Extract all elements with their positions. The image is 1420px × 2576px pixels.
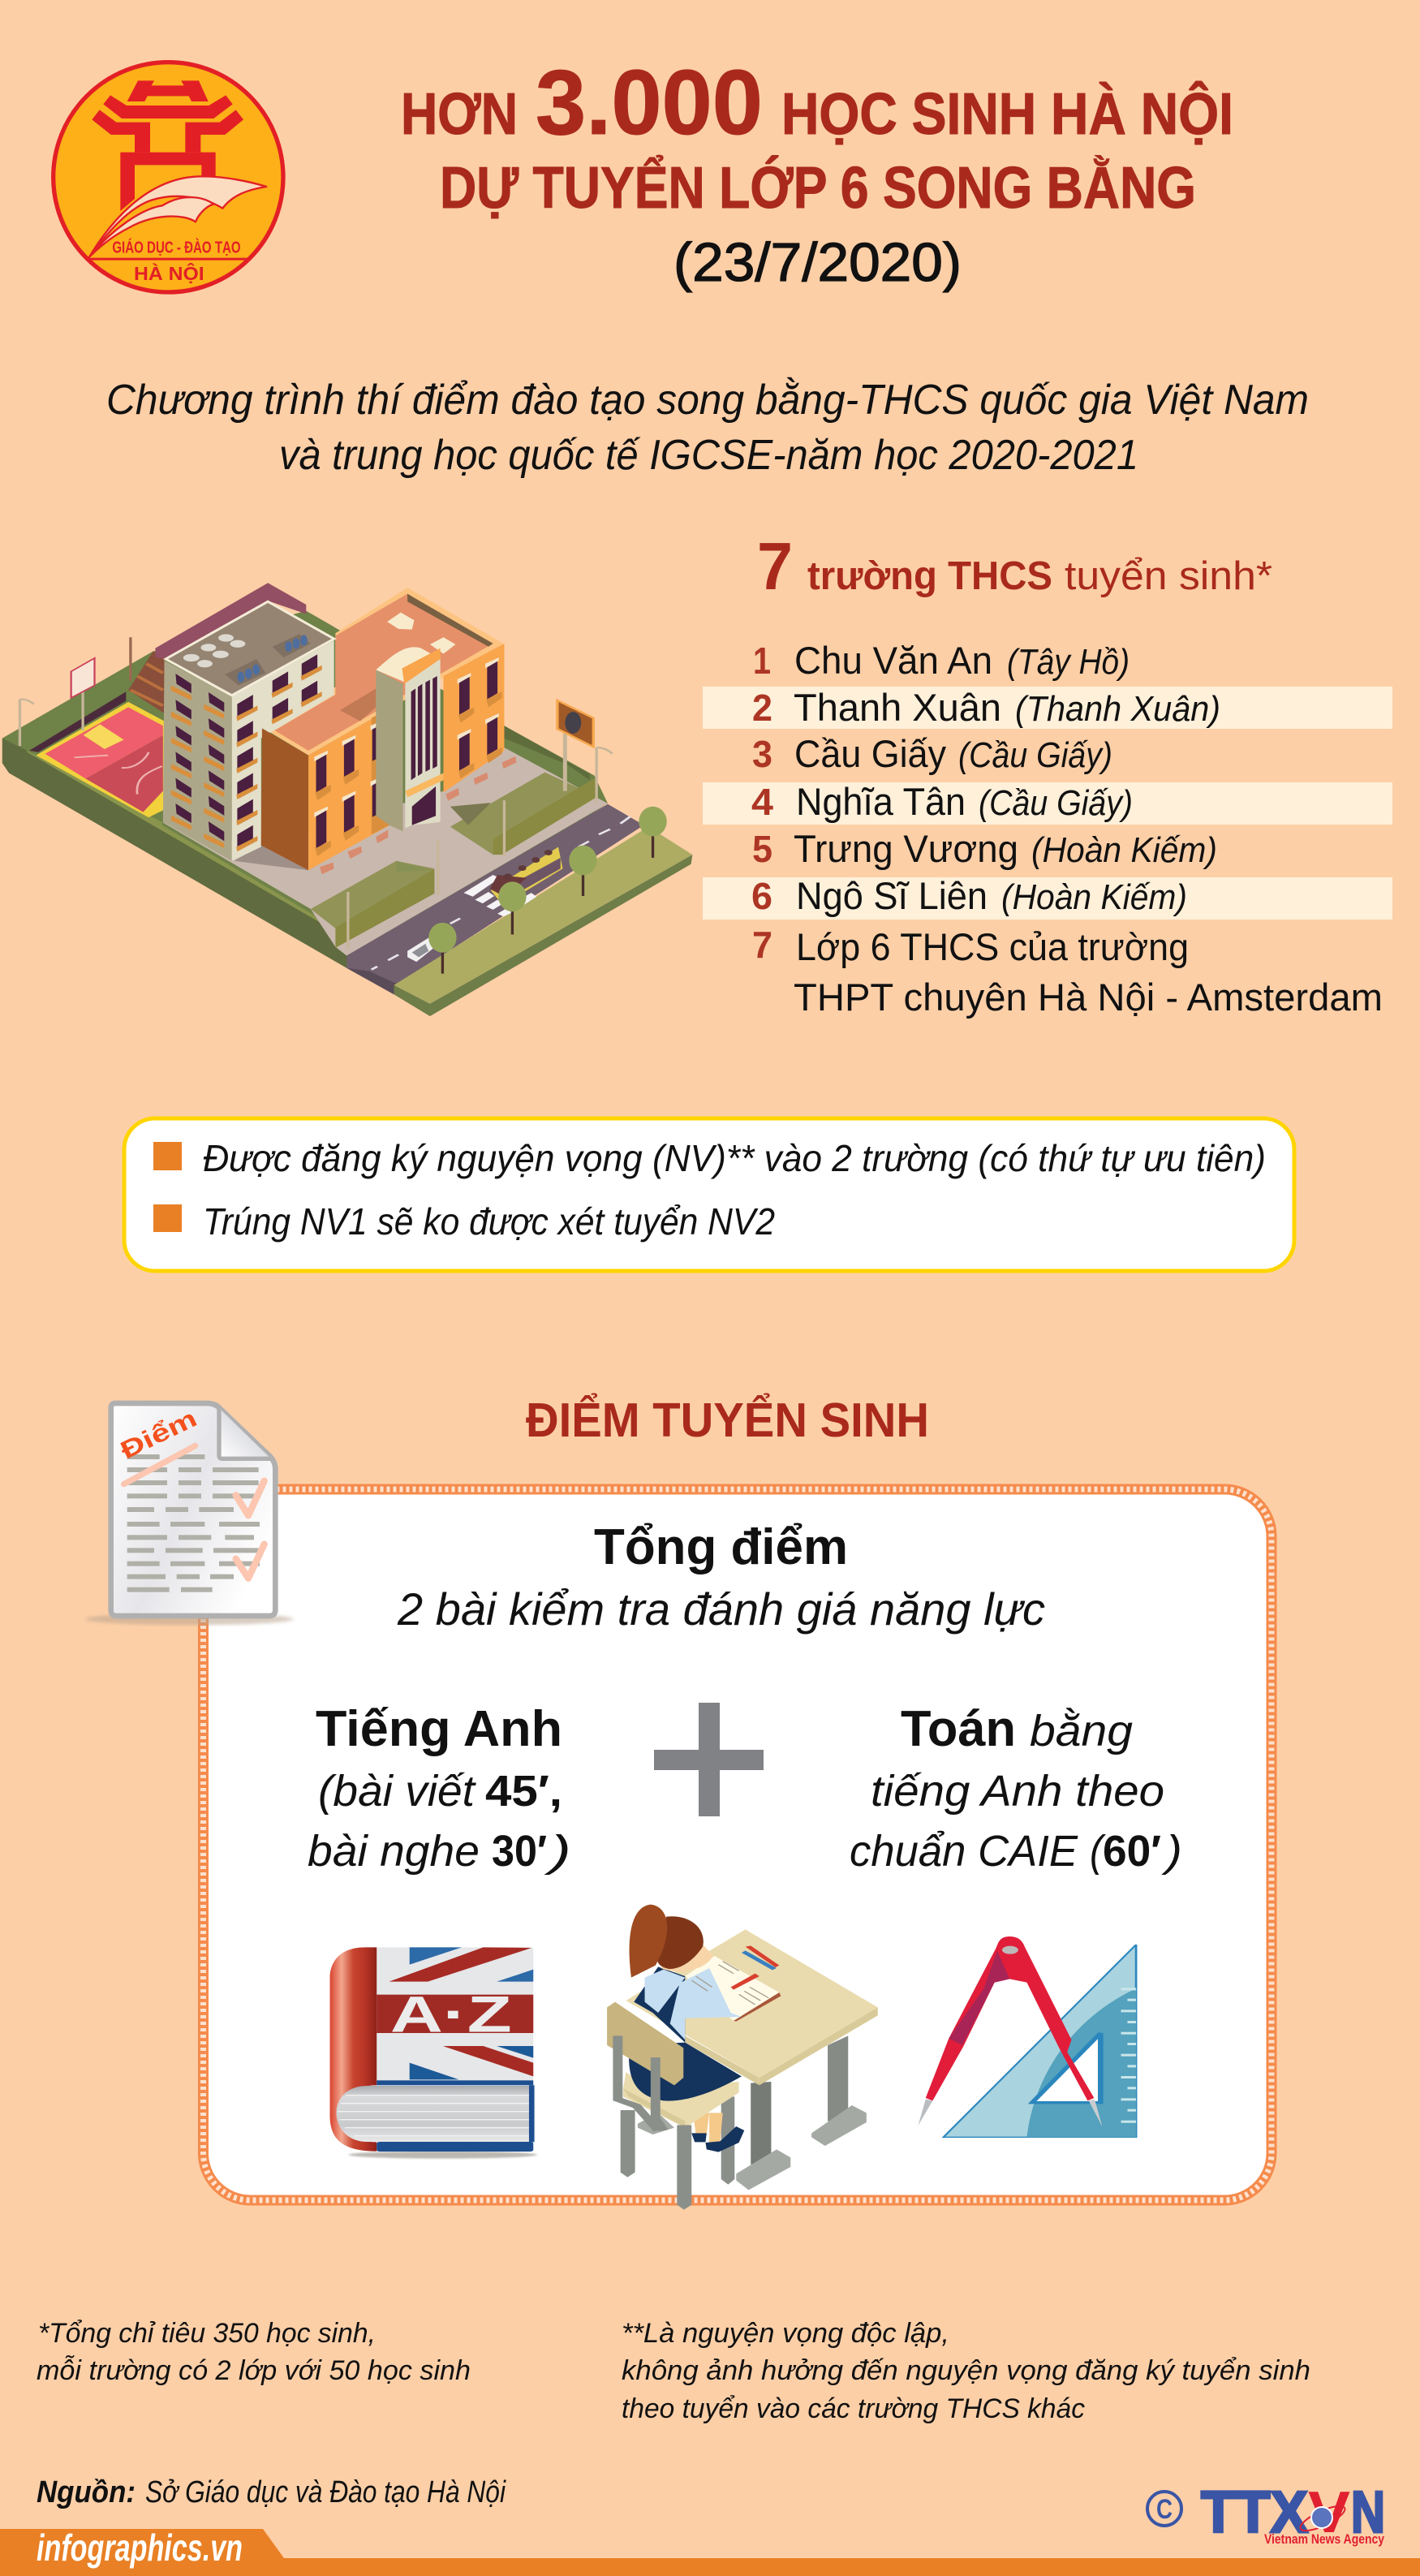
school list: Ngô Sĩ Liên <box>796 874 988 917</box>
school list: (Hoàn Kiếm) <box>1031 830 1217 870</box>
bullet icon 1 <box>153 1142 182 1170</box>
icon: score document <box>86 1401 294 1626</box>
title: (23/7/2020) <box>673 232 962 293</box>
Math test text: Toán <box>901 1701 1016 1757</box>
school list: Thanh Xuân <box>794 686 1001 729</box>
heading: 7 schools: tuyển sinh* <box>1065 554 1272 598</box>
illustration: isometric school <box>2 583 693 1016</box>
footer band: infographics.vn <box>37 2526 243 2569</box>
school list: Nghĩa Tân <box>796 780 966 823</box>
Math test text: chuẩn CAIE <box>850 1827 1078 1876</box>
logo: TTXVN: C <box>1156 2494 1173 2525</box>
logo: TTXVN: N <box>1351 2480 1385 2545</box>
icon: English dictionary <box>330 1947 537 2159</box>
total description: 2 bài kiểm tra đánh giá năng lực <box>397 1583 1045 1635</box>
illustration: student at desk <box>607 1905 878 2210</box>
logo: TTXVN: Vietnam News Agency <box>1264 2531 1384 2547</box>
logo: TTXVN: TTX <box>1201 2480 1308 2545</box>
title: HỌC SINH HÀ NỘI <box>781 81 1233 147</box>
school list: Cầu Giấy <box>794 732 946 775</box>
callout: registration rules: Trúng NV1 sẽ ko được xét tuyển NV2 <box>203 1200 775 1243</box>
bullet icon 2 <box>153 1204 182 1232</box>
school list: 4 <box>751 781 773 823</box>
road <box>346 804 643 994</box>
Math test text: bằng <box>1030 1707 1133 1755</box>
logo: Giáo dục Đào tạo Hà Nội: HÀ NỘI <box>134 263 204 284</box>
logo: TTXVN: V <box>1308 2480 1350 2545</box>
English test text: ) <box>543 1827 571 1876</box>
icon: plus <box>654 1703 764 1816</box>
source <box>37 2475 506 2509</box>
Math test text: tiếng Anh theo <box>871 1767 1164 1816</box>
logo: TTXVN <box>1147 2480 1385 2547</box>
school list: (Hoàn Kiếm) <box>1001 877 1187 917</box>
heading: 7 schools: trường THCS <box>807 554 1052 598</box>
subtitle: Chương trình thí điểm đào tạo song bằng-THCS quốc gia Việt Nam <box>106 377 1309 424</box>
logo: Giáo dục Đào tạo Hà Nội <box>51 60 286 295</box>
illustrations: book, student and geometry tools <box>329 1904 1138 2209</box>
source: Nguồn: <box>37 2475 136 2509</box>
footnote: quota: *Tổng chỉ tiêu 350 học sinh, <box>38 2318 376 2349</box>
school list: 2 <box>752 687 772 729</box>
court <box>29 691 126 752</box>
Math test text: ) <box>1160 1827 1182 1876</box>
callout: registration rules: Được đăng ký nguyện vọng (NV)** vào 2 trường (có thứ tự ưu tiên) <box>203 1137 1266 1179</box>
footnote: quota <box>37 2318 471 2386</box>
school list: 7 <box>752 924 772 966</box>
Math test text: ( <box>1090 1827 1106 1876</box>
panel: score card <box>203 1489 1272 2200</box>
ground <box>2 611 608 968</box>
school list: (Cầu Giấy) <box>979 783 1133 823</box>
school list: 1 <box>753 640 771 682</box>
English test text: (bài viết <box>318 1767 476 1816</box>
tower <box>163 661 232 861</box>
orange building <box>261 728 308 870</box>
school list: (Tây Hồ) <box>1007 642 1130 682</box>
English test text: bài nghe <box>308 1827 480 1876</box>
title: 3.000 <box>536 51 763 153</box>
school list: (Cầu Giấy) <box>958 735 1112 775</box>
school list: THPT chuyên Hà Nội - Amsterdam <box>794 976 1383 1019</box>
section heading: ĐIỂM TUYỂN SINH <box>526 1394 929 1447</box>
orange roof <box>262 588 503 756</box>
icon: English dictionary: A·Z <box>390 1986 512 2043</box>
English test text: 30′ <box>492 1827 547 1876</box>
vehicles <box>491 847 563 901</box>
title: HƠN <box>401 82 518 147</box>
subtitle <box>106 377 1309 479</box>
school list <box>703 639 1392 1019</box>
icon: score document: Điểm <box>116 1404 201 1465</box>
icon: set square <box>944 1945 1136 2137</box>
Math test text: 60′ <box>1103 1827 1161 1876</box>
callout: registration rules <box>124 1118 1294 1271</box>
heading: 7 schools: 7 <box>757 528 793 604</box>
stairs and back block <box>128 651 165 713</box>
school list: Lớp 6 THCS của trường <box>796 925 1189 968</box>
logo: Giáo dục Đào tạo Hà Nội: GIÁO DỤC - ĐÀO TẠO <box>112 239 241 257</box>
title: DỰ TUYỂN LỚP 6 SONG BẰNG <box>440 155 1196 221</box>
footnote: quota: mỗi trường có 2 lớp với 50 học sinh <box>37 2355 471 2386</box>
Math test text <box>850 1701 1182 1876</box>
total heading: Tổng điểm <box>594 1519 848 1575</box>
school list: (Thanh Xuân) <box>1015 689 1220 729</box>
lawns <box>311 861 434 928</box>
English test text <box>308 1701 571 1876</box>
English test text: 45′, <box>485 1767 562 1816</box>
school list: 3 <box>752 733 772 775</box>
footnote: independent preference: theo tuyển vào các trường THCS khác <box>622 2393 1085 2424</box>
source: Sở Giáo dục và Đào tạo Hà Nội <box>145 2475 506 2509</box>
school list: 5 <box>752 828 772 870</box>
heading: 7 schools <box>757 528 1272 604</box>
school list: 6 <box>751 875 772 917</box>
school list: Chu Văn An <box>794 639 992 682</box>
footnote: independent preference: không ảnh hưởng đến nguyện vọng đăng ký tuyển sinh <box>622 2355 1310 2386</box>
footnote: independent preference: **Là nguyện vọng độc lập, <box>622 2318 949 2349</box>
school list: Trưng Vương <box>794 827 1018 870</box>
icon: compass <box>918 1936 1102 2126</box>
title <box>401 51 1233 293</box>
English test text: Tiếng Anh <box>316 1701 562 1757</box>
footnote: independent preference <box>622 2318 1310 2424</box>
poles and signs <box>19 691 613 950</box>
trees <box>442 834 653 974</box>
footer band <box>0 2526 1420 2576</box>
subtitle: và trung học quốc tế IGCSE-năm học 2020-2021 <box>279 432 1138 479</box>
